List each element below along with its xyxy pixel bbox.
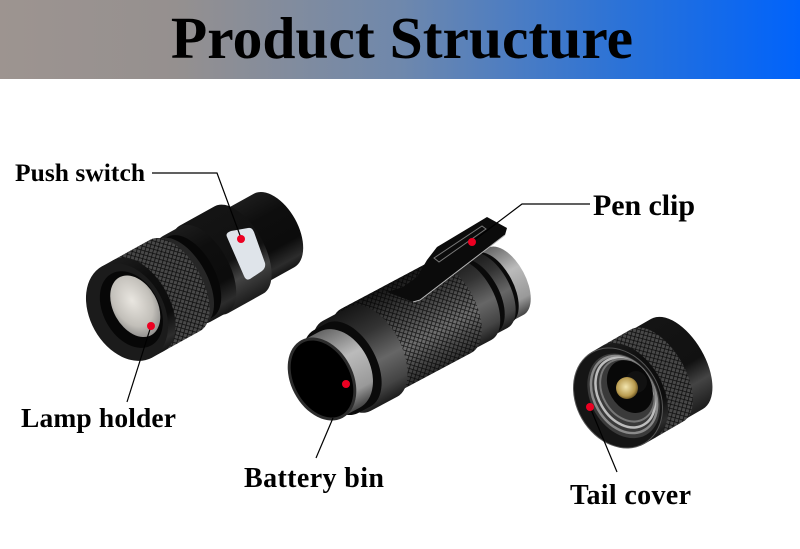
leader: tail cover xyxy=(590,407,617,472)
far outer groove xyxy=(448,244,529,336)
black ring xyxy=(289,310,395,426)
tail cover xyxy=(555,304,728,465)
inner threads xyxy=(573,340,675,451)
pen clip xyxy=(387,217,507,302)
rim xyxy=(555,331,681,465)
leader: lamp holder xyxy=(127,326,151,402)
switch collar xyxy=(158,194,285,325)
cap end xyxy=(607,305,727,435)
title: Product Structure xyxy=(171,5,633,71)
far groove xyxy=(430,250,516,348)
collar xyxy=(298,294,422,424)
inner cavity xyxy=(598,352,662,421)
bezel xyxy=(76,245,191,372)
push switch button xyxy=(226,228,265,280)
label: lamp holder: Lamp holder xyxy=(21,402,176,433)
leader: pen clip xyxy=(473,204,590,241)
leader: battery bin xyxy=(316,418,333,458)
ring collar xyxy=(141,214,250,334)
lens xyxy=(100,267,171,346)
contact pin xyxy=(616,371,647,399)
label: battery bin: Battery bin xyxy=(244,463,384,494)
leader: push switch xyxy=(152,173,241,238)
label: tail cover: Tail cover xyxy=(570,480,691,511)
front section xyxy=(562,329,684,461)
header banner xyxy=(0,0,800,79)
flashlight body xyxy=(270,225,547,439)
rear tube xyxy=(191,182,315,302)
marker dots xyxy=(147,235,594,411)
knurled band xyxy=(578,316,708,452)
far collar xyxy=(403,249,513,364)
threads xyxy=(275,318,386,431)
label: push switch: Push switch xyxy=(15,158,145,187)
far threads xyxy=(454,238,541,333)
far band xyxy=(435,243,527,346)
label: pen clip: Pen clip xyxy=(593,189,695,222)
knurled grip xyxy=(89,227,224,365)
flashlight head xyxy=(69,173,320,375)
front rim xyxy=(69,249,185,375)
battery opening xyxy=(274,326,370,432)
grooves xyxy=(130,223,235,339)
knurled tube xyxy=(317,251,496,410)
